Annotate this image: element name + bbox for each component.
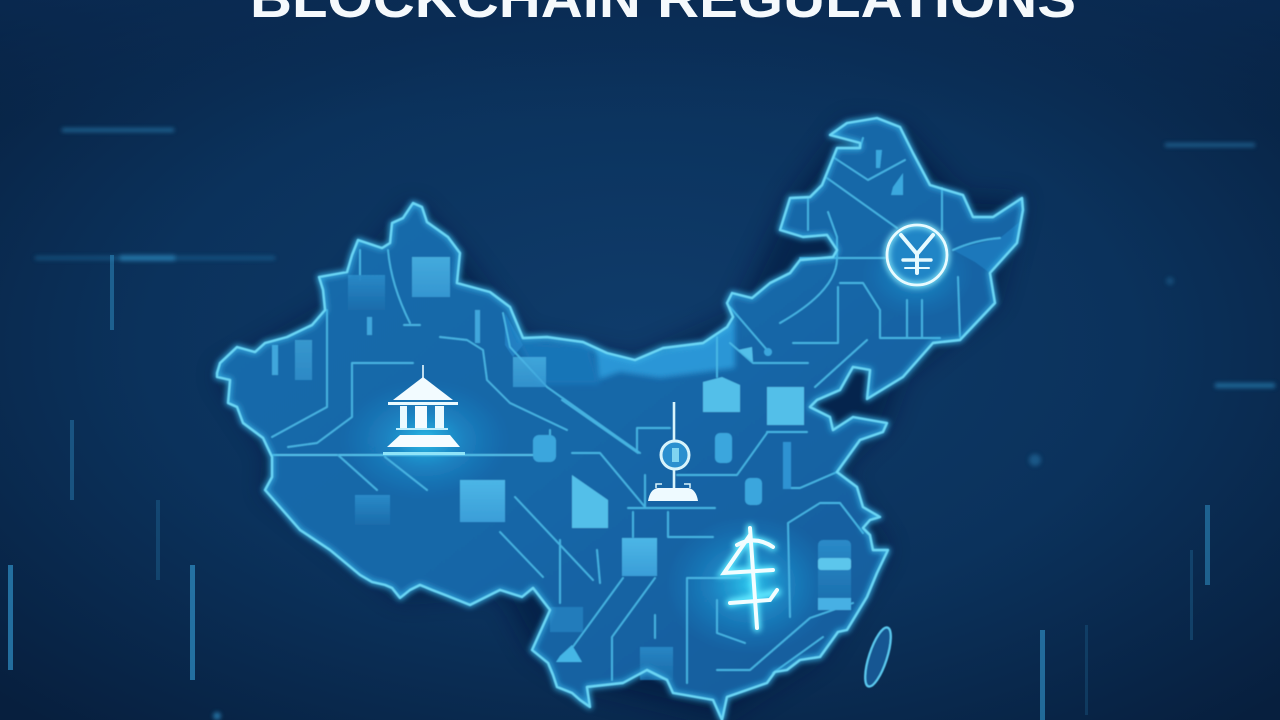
map of China — [217, 118, 1023, 720]
circuit lines — [272, 138, 1000, 683]
map coastline glow — [217, 118, 1023, 720]
icon: bank building — [383, 365, 465, 455]
icon: yuan coin — [886, 224, 948, 286]
map coastline — [217, 118, 1023, 720]
icon: glowing currency symbol — [724, 528, 777, 628]
blue data blocks — [272, 150, 903, 680]
map drop shadow — [217, 123, 1022, 720]
map landmass — [217, 118, 1023, 720]
icon: broadcast tower — [648, 402, 698, 501]
Taiwan — [860, 625, 896, 689]
inner glow regions — [340, 220, 1022, 655]
